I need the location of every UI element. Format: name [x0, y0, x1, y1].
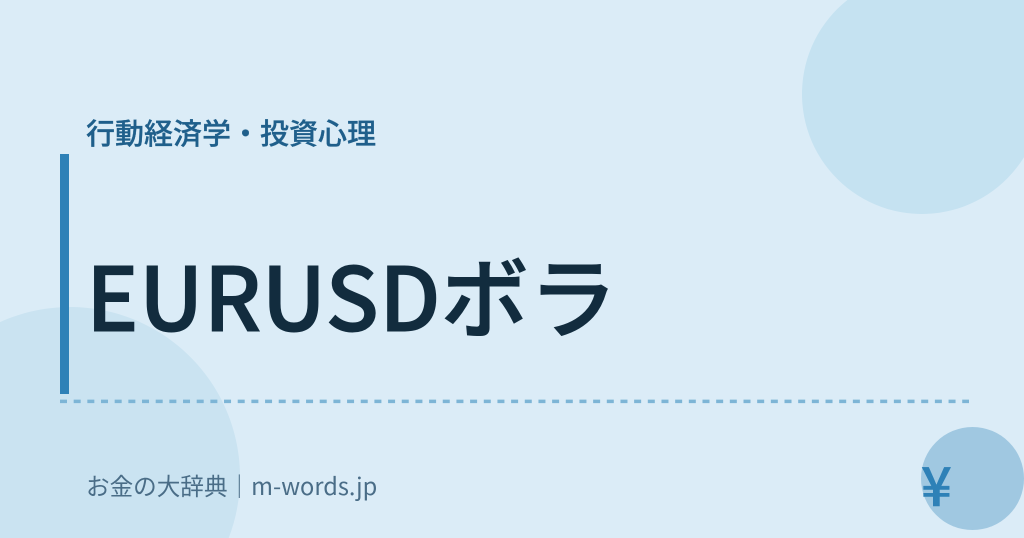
- main title: EURUSDボラ: [86, 230, 617, 357]
- decorative circle: top right: [802, 0, 1024, 214]
- icon: yen sign: ¥: [921, 443, 952, 522]
- footer site name: お金の大辞典｜m-words.jp: [86, 468, 377, 502]
- decorative circle: bottom right: [921, 427, 1024, 530]
- dashed divider: [60, 400, 969, 404]
- decorative circle: bottom left: [0, 307, 240, 538]
- category heading: 行動経済学・投資心理: [86, 111, 376, 153]
- accent bar: [60, 154, 69, 394]
